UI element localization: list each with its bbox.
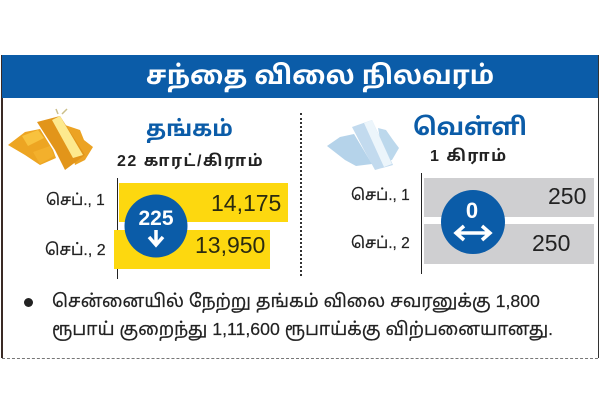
left border <box>1 55 2 358</box>
bar: Sept 1 gold <box>119 183 288 222</box>
heading: silver: வெள்ளி <box>413 114 527 141</box>
subheading: silver: 1 கிராம் <box>430 148 508 165</box>
badge: drop 225 <box>124 194 188 258</box>
bar: Sept 2 silver <box>424 224 594 264</box>
heading: gold: தங்கம் <box>146 116 233 141</box>
label: Sept 2: செப்., 2 <box>351 235 410 252</box>
bottom dotted border <box>2 358 598 359</box>
panel: gold <box>8 108 264 170</box>
bar: Sept 2 gold <box>114 230 270 269</box>
label: Sept 1: செப்., 1 <box>351 187 410 204</box>
subheading: gold: 22 காரட்/கிராம் <box>117 153 264 170</box>
label: Sept 1: செப்., 1 <box>46 192 105 209</box>
label: Sept 2: செப்., 2 <box>45 242 106 259</box>
column divider <box>300 113 302 276</box>
badge: no change 0: 0 <box>466 198 478 223</box>
note line 1: சென்னையில் நேற்று தங்கம் விலை சவரனுக்கு 1,800 <box>52 291 540 311</box>
panel: silver <box>327 114 527 170</box>
bullet <box>24 298 33 307</box>
title banner <box>2 55 598 98</box>
badge: drop 225: 225 <box>138 207 174 230</box>
axis <box>420 173 422 274</box>
value: 250: 250 <box>548 183 586 209</box>
icon: gold bars <box>8 108 93 170</box>
chart: gold prices <box>45 178 288 279</box>
title: சந்தை விலை நிலவரம் <box>146 60 494 90</box>
icon: silver bars <box>327 120 399 170</box>
badge: no change 0 <box>441 190 505 254</box>
axis <box>116 178 118 279</box>
chart: silver prices <box>351 173 594 274</box>
note <box>24 291 553 341</box>
value: 14,175: 14,175 <box>211 190 281 216</box>
note line 2: ரூபாய் குறைந்து 1,11,600 ரூபாய்க்கு விற்பனையானது. <box>52 319 553 339</box>
value: 250: 250 <box>532 230 570 256</box>
right border <box>598 55 599 358</box>
value: 13,950: 13,950 <box>195 232 265 258</box>
bar: Sept 1 silver <box>424 178 594 217</box>
